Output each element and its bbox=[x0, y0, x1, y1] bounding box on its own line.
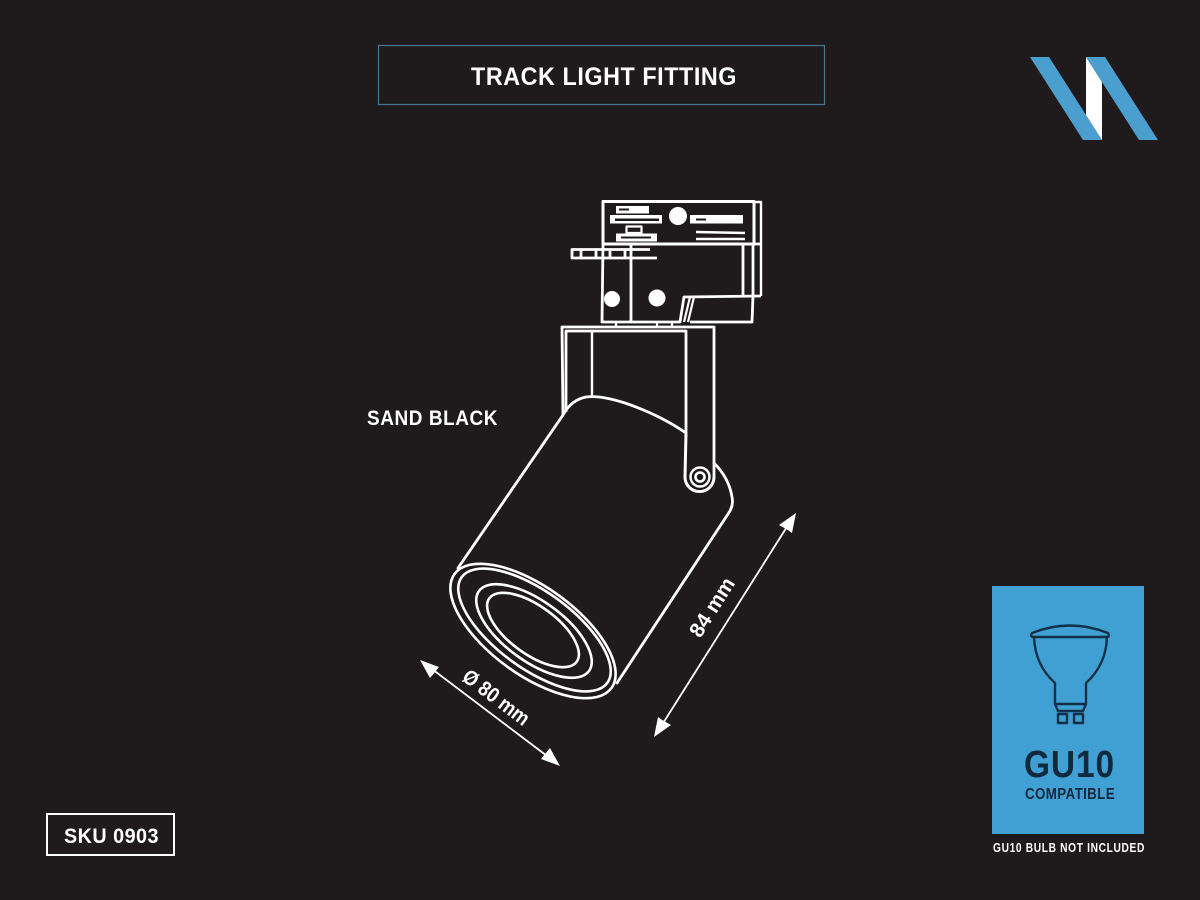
icon: GU10 bulb bbox=[1031, 626, 1109, 723]
panel subheading: COMPATIBLE bbox=[1025, 786, 1115, 803]
adapter top plate bbox=[603, 202, 761, 296]
lamp face rings bbox=[429, 538, 637, 724]
mounting bracket bbox=[562, 327, 714, 477]
pivot screw bbox=[685, 433, 714, 492]
dimension arrow: length: 84 mm bbox=[685, 573, 740, 642]
panel: GU10 compatibility bbox=[992, 586, 1144, 834]
label: finish: SAND BLACK bbox=[367, 407, 498, 430]
lamp body bbox=[458, 397, 732, 683]
adapter clip bbox=[572, 250, 657, 258]
title: TRACK LIGHT FITTING bbox=[471, 63, 737, 91]
footnote: GU10 BULB NOT INCLUDED bbox=[993, 841, 1145, 855]
panel heading: GU10 bbox=[1024, 744, 1115, 786]
adapter body bbox=[602, 244, 761, 327]
dimension arrow: length bbox=[654, 513, 796, 737]
logo bbox=[1030, 57, 1158, 140]
track adapter drawing bbox=[429, 202, 761, 724]
dimension arrow: diameter bbox=[420, 660, 560, 766]
SKU badge bbox=[47, 814, 174, 855]
dimension arrow: diameter: Ø 80 mm bbox=[458, 665, 534, 730]
SKU badge: SKU 0903 bbox=[64, 825, 159, 848]
title bbox=[378, 46, 824, 104]
